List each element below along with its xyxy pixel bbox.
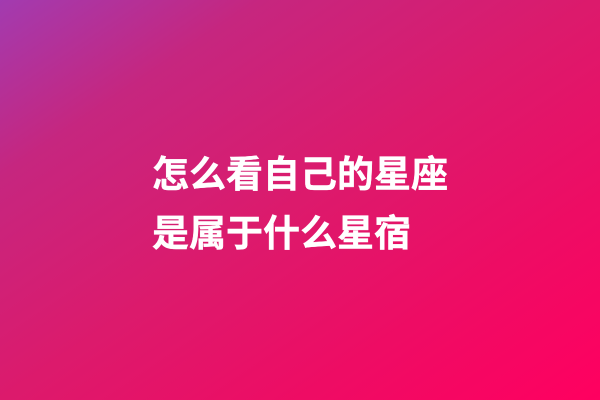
title: 是属于什么星宿 — [152, 213, 411, 254]
title — [152, 154, 448, 254]
title: 怎么看自己的星座 — [152, 154, 448, 195]
